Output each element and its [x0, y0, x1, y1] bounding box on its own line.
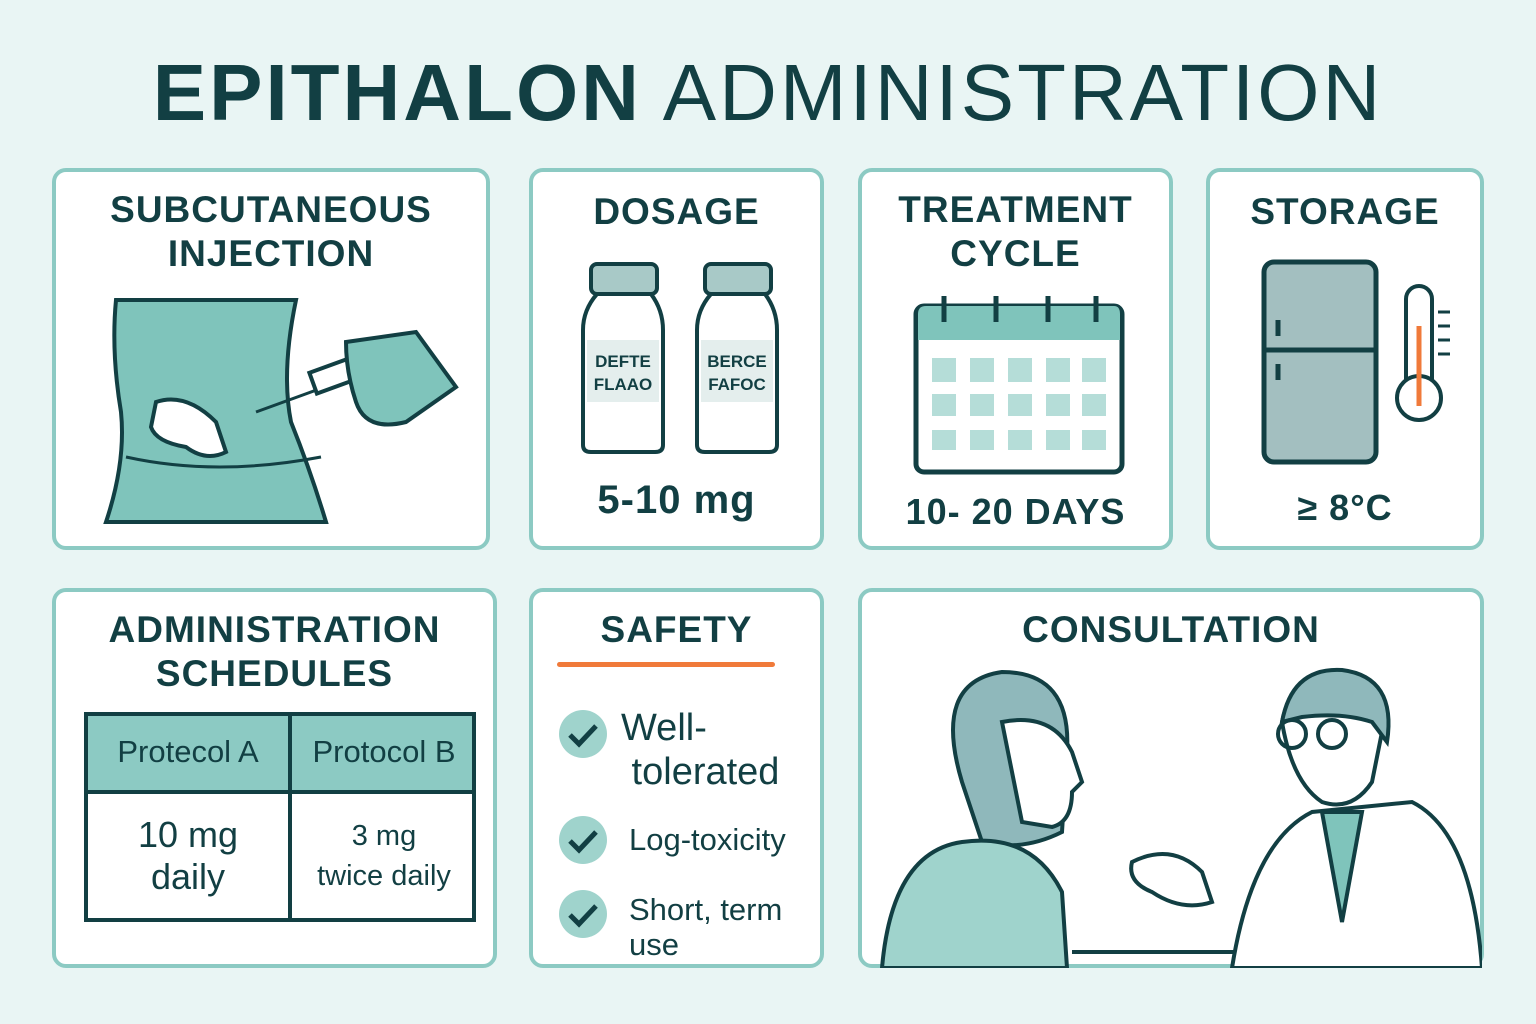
panel: storage	[1206, 168, 1484, 550]
table: Protecol A	[117, 734, 259, 769]
heading: SCHEDULES	[156, 653, 393, 694]
panel: subcutaneous injection	[52, 168, 490, 550]
table	[84, 712, 476, 922]
table: Protocol B	[312, 734, 456, 769]
heading	[109, 609, 440, 694]
heading: STORAGE	[1250, 191, 1440, 232]
checklist: tolerated	[632, 751, 779, 793]
panel: consultation	[858, 588, 1484, 968]
heading: ADMINISTRATION	[109, 609, 440, 650]
panel: safety	[529, 588, 824, 968]
storage value: ≥ 8°C	[1297, 487, 1393, 528]
heading: INJECTION	[168, 233, 374, 274]
checklist: Log-toxicity	[629, 822, 786, 857]
icon: fridge and thermometer	[1262, 260, 1450, 464]
icon: abdomen injection	[103, 298, 459, 524]
icon: vials: DEFTE	[595, 352, 651, 371]
icon: vials: BERCE	[707, 352, 767, 371]
checklist: Well-	[621, 707, 707, 749]
checklist: Short, term	[629, 892, 782, 927]
panel: treatment cycle	[858, 168, 1173, 550]
heading: DOSAGE	[593, 191, 760, 232]
heading: TREATMENT	[898, 189, 1133, 230]
icon: vials	[581, 262, 779, 454]
heading: CYCLE	[950, 233, 1081, 274]
illustration: patient and doctor	[880, 668, 1482, 968]
table: 3 mg	[352, 820, 416, 852]
heading: CONSULTATION	[1022, 609, 1320, 650]
heading	[110, 189, 432, 274]
title: EPITHALON ADMINISTRATION	[153, 48, 1383, 137]
heading	[898, 189, 1133, 274]
dosage value: 5-10 mg	[597, 478, 756, 522]
checklist: use	[629, 927, 679, 962]
icon: vials: FAFOC	[708, 375, 766, 394]
heading: SUBCUTANEOUS	[110, 189, 432, 230]
cycle value: 10- 20 DAYS	[906, 491, 1125, 532]
panel: dosage	[529, 168, 824, 550]
checklist	[559, 707, 786, 962]
panel: administration schedules	[52, 588, 497, 968]
table: daily	[151, 856, 225, 897]
heading: SAFETY	[601, 609, 752, 650]
table: 10 mg	[138, 814, 238, 855]
icon: calendar	[914, 296, 1124, 474]
icon: vials: FLAAO	[594, 375, 652, 394]
table: twice daily	[317, 860, 451, 892]
